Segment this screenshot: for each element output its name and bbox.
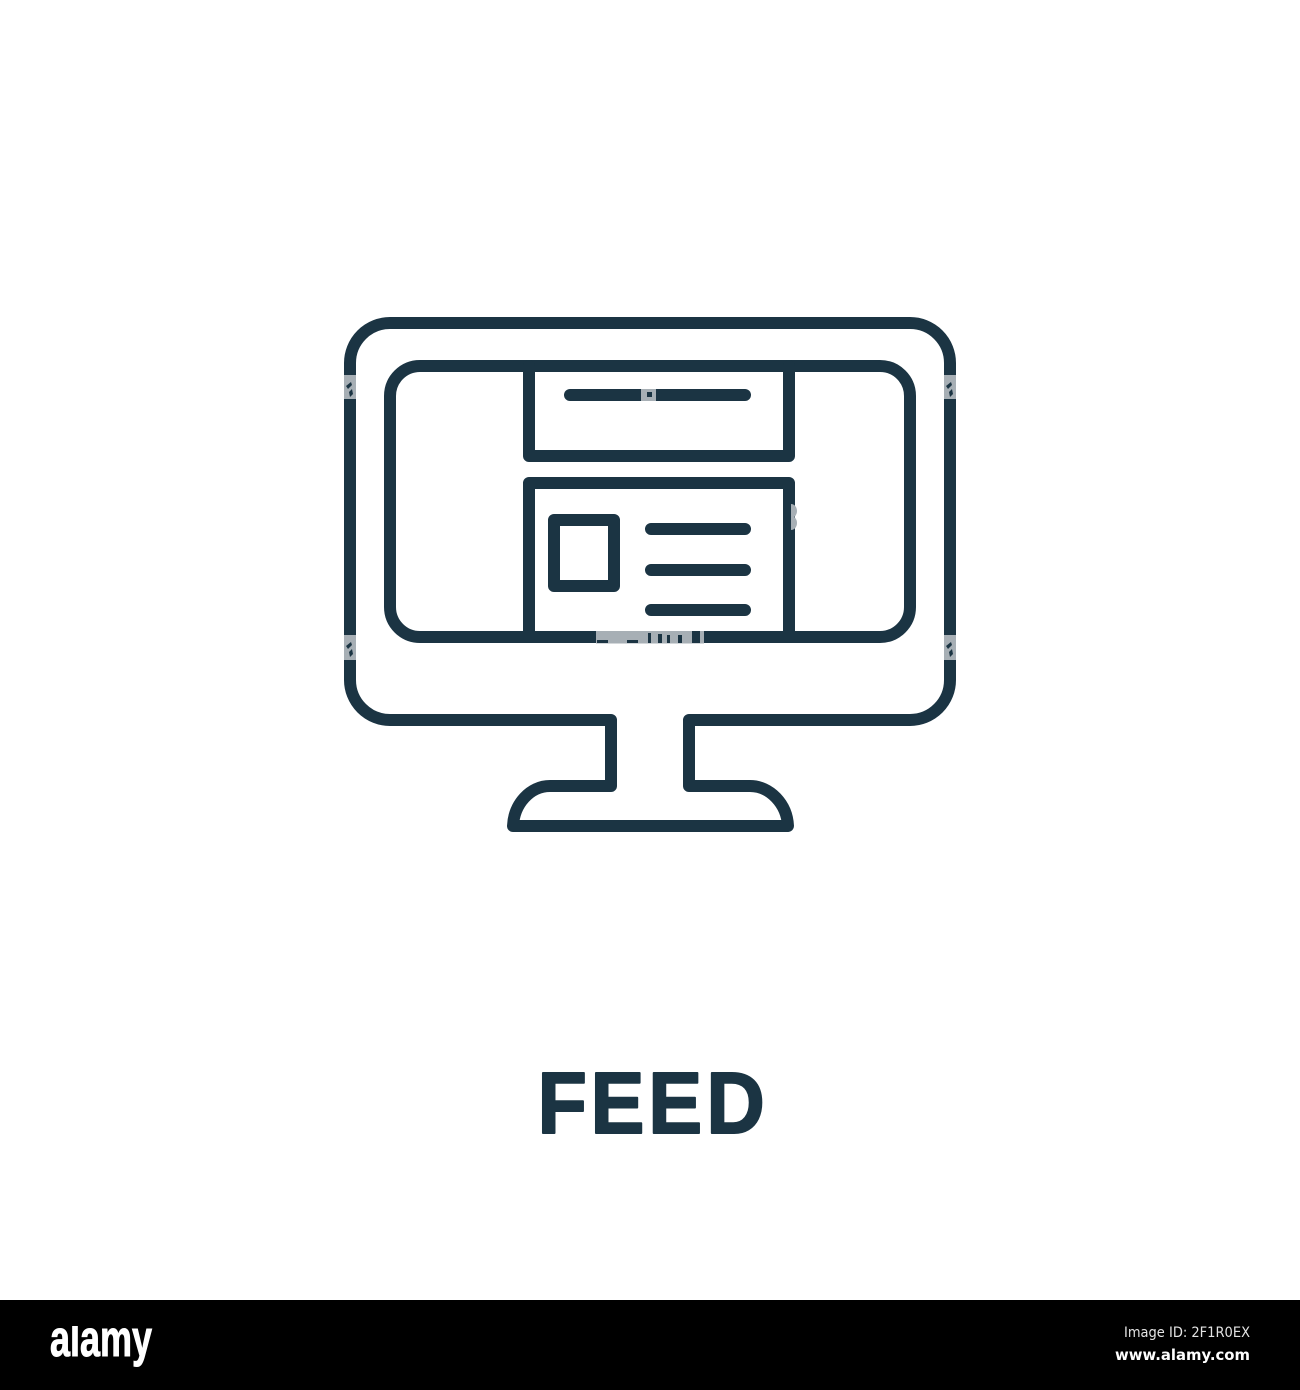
thumbnail (554, 520, 614, 586)
footer bar (0, 1300, 1300, 1390)
watermark fragments (344, 375, 956, 660)
website: www.alamy.com (1115, 1346, 1250, 1364)
icon: computer monitor showing feed (350, 323, 950, 826)
text lines (651, 529, 745, 610)
screen (390, 366, 910, 637)
top card headline line (570, 389, 745, 401)
footer logo: alamy (50, 1310, 152, 1367)
watermark counters (346, 382, 953, 657)
lower feed card (529, 483, 789, 637)
top feed card (529, 366, 789, 456)
monitor body and stand (350, 323, 950, 826)
image id: Image ID: 2F1R0EX (1124, 1325, 1250, 1341)
title: FEED (538, 1054, 765, 1152)
